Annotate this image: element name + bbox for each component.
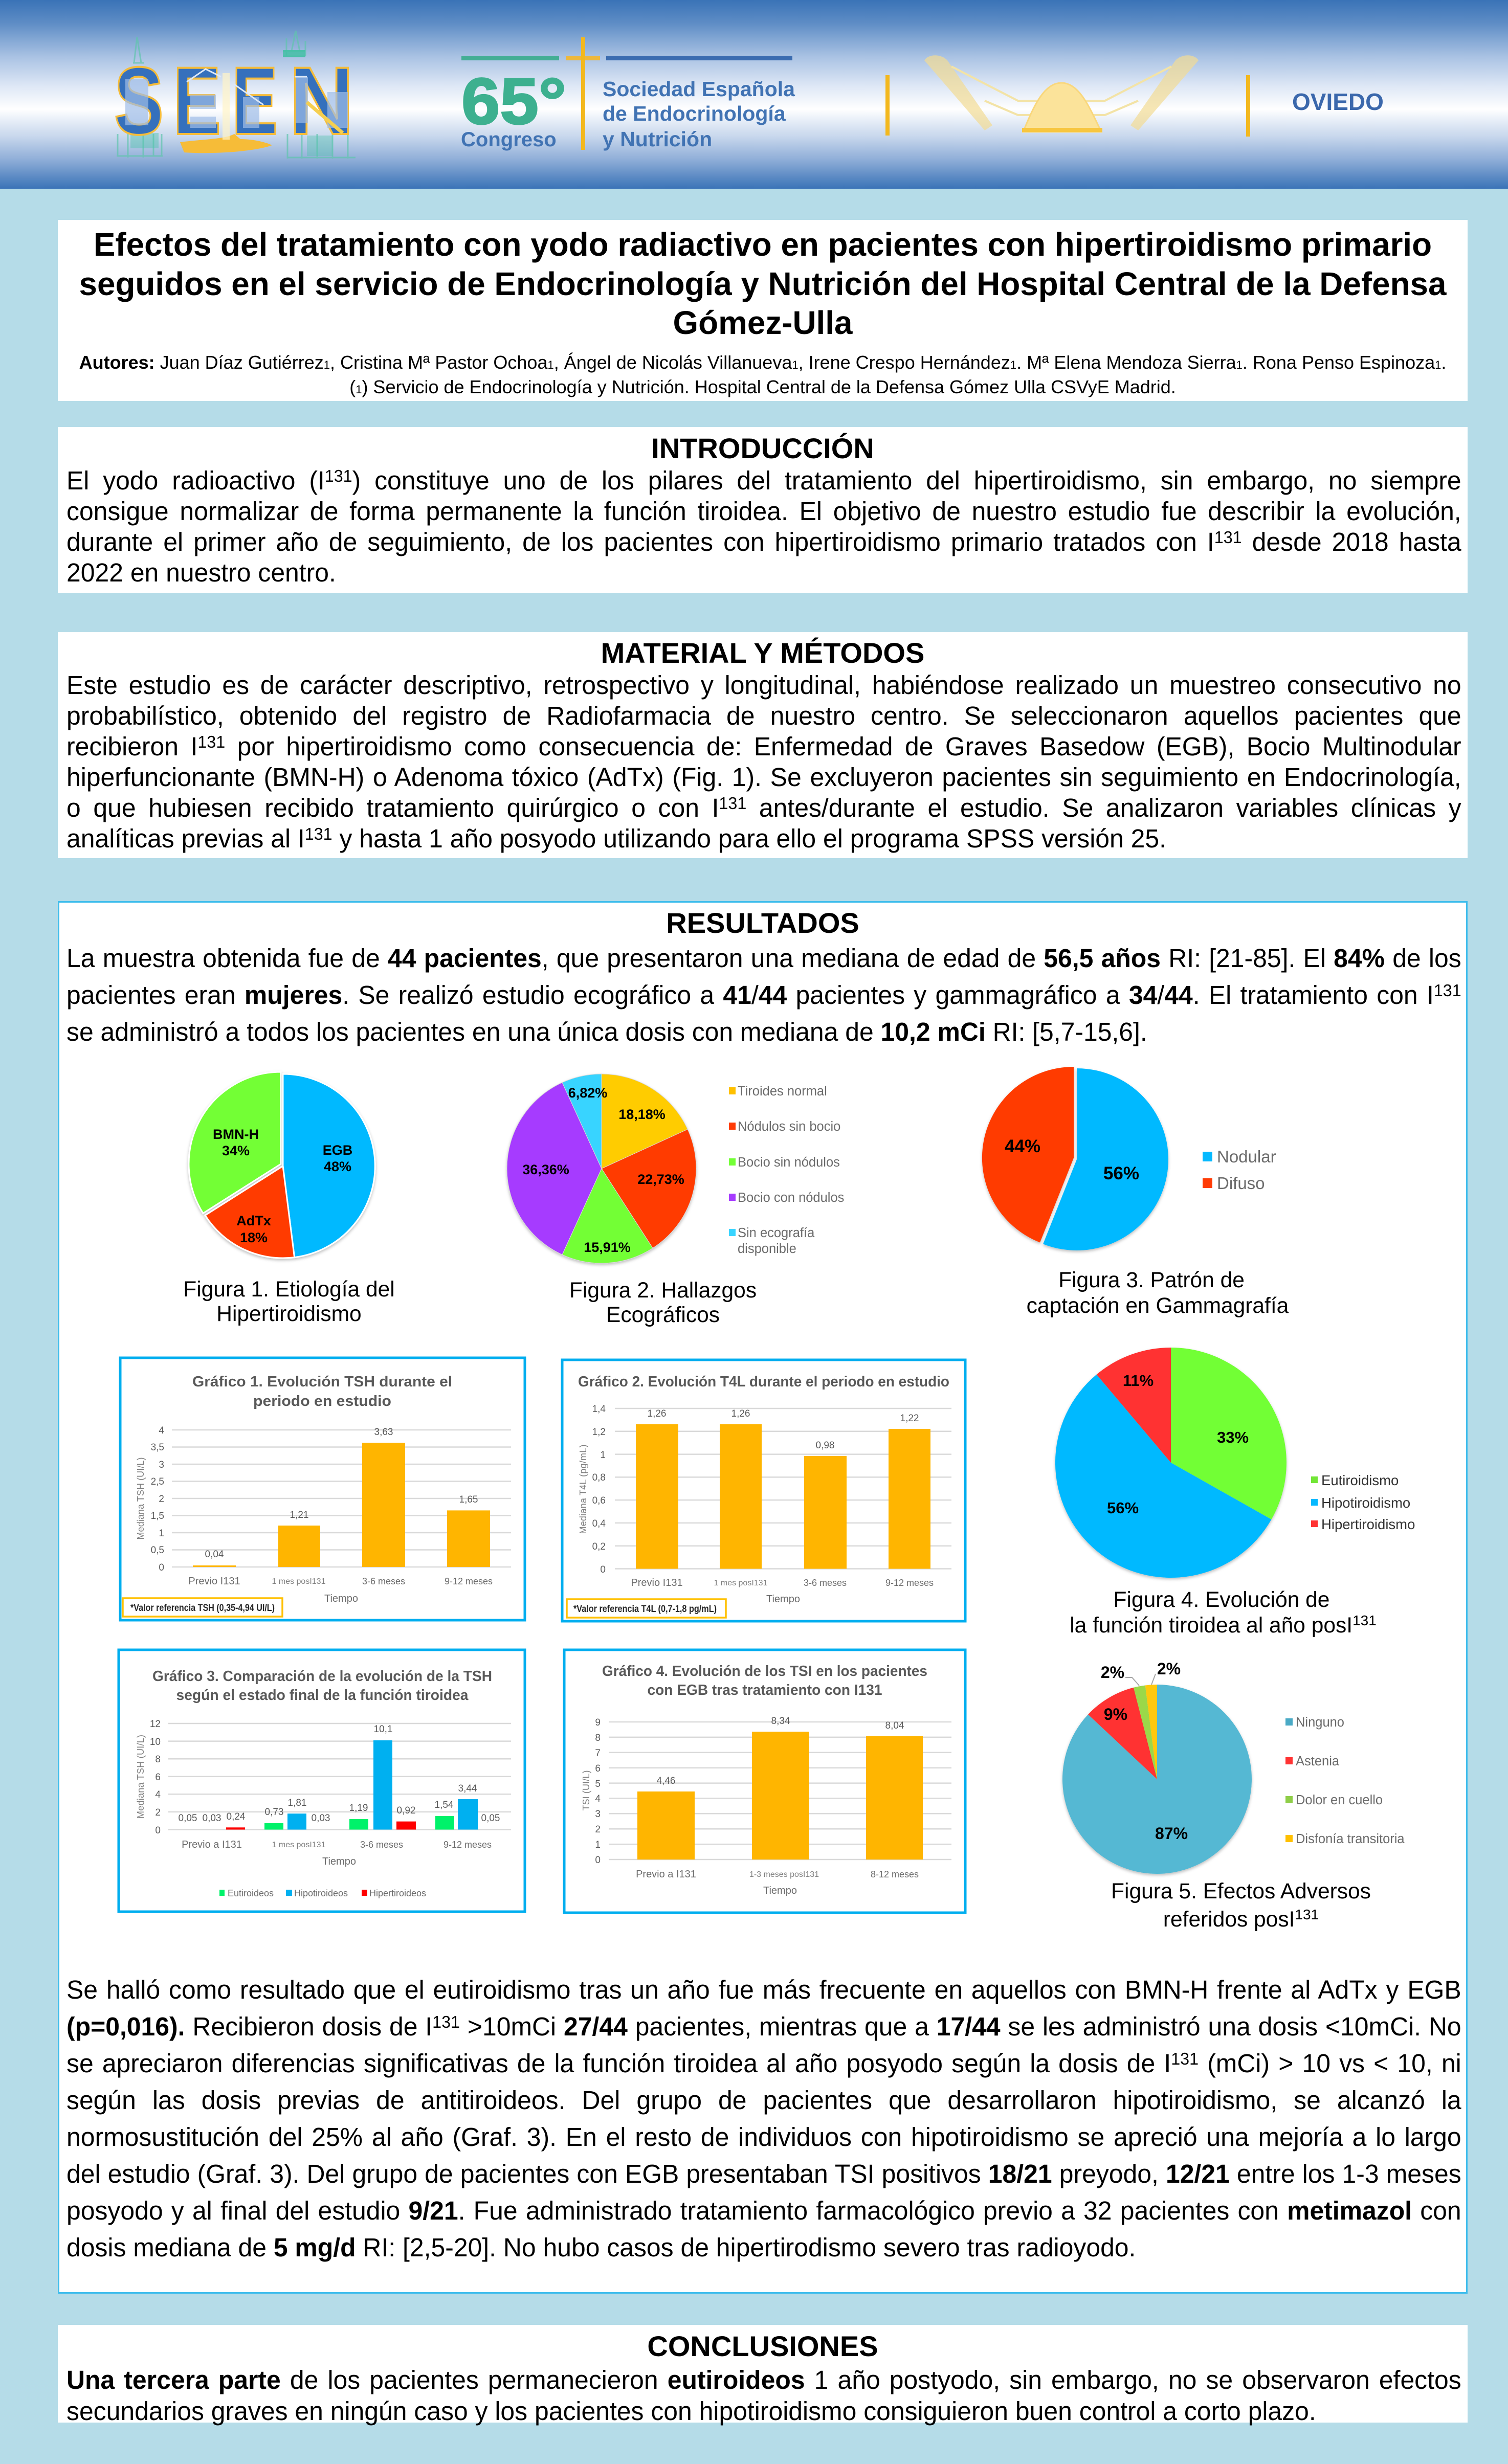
pie chart: función tiroidea: 11%	[1123, 1372, 1154, 1390]
chart: gráfico 3 TSH comparación: 10,1	[374, 1724, 392, 1735]
pie chart: etiología: AdTx	[236, 1213, 271, 1228]
chart: gráfico 4 TSI: 1	[595, 1840, 601, 1850]
chart: gráfico 3 TSH comparación: 0	[155, 1825, 161, 1836]
logo: Oviedo: OVIEDO	[1292, 88, 1384, 115]
chart: gráfico 2 T4L: Tiempo	[766, 1594, 800, 1605]
text: introducción: durante el primer año de seguimiento, de los pacientes con hipertiroidismo primario tratados con I131 desde 2018 hasta	[66, 527, 1461, 556]
chart: gráfico 4 TSI: 2	[595, 1824, 601, 1835]
caption: figura 3: captación en Gammagrafía	[1027, 1294, 1289, 1318]
caption: figura 2: Figura 2. Hallazgos	[569, 1279, 757, 1303]
pie chart: patrón de captación: 56%	[1103, 1163, 1139, 1183]
pie chart: etiología: 48%	[324, 1159, 351, 1174]
text: material y métodos	[66, 670, 1461, 853]
text: resultados discusión: (p=0,016). Recibieron dosis de I131 >10mCi 27/44 pacientes, mientras que a 17/44 se les administró una dosis <10mCi. No	[66, 2012, 1461, 2041]
heading: poster title: Efectos del tratamiento con yodo radiactivo en pacientes con hipertiroidismo primario	[94, 226, 1432, 263]
chart: gráfico 1 TSH: 0,5	[151, 1545, 164, 1556]
chart: gráfico 3 TSH comparación: 1 mes posI131	[272, 1841, 326, 1849]
pie chart: efectos adversos: 87%	[1155, 1824, 1188, 1843]
chart: gráfico 4 TSI: 8,34	[771, 1716, 790, 1727]
pie chart: etiología: 34%	[222, 1143, 250, 1158]
pie chart: patrón de captación	[982, 1067, 1168, 1250]
legend: patrón de captación: Nodular	[1217, 1147, 1276, 1166]
caption: figura 5: Figura 5. Efectos Adversos	[1111, 1879, 1371, 1903]
text: resultados intro: pacientes eran mujeres. Se realizó estudio ecográfico a 41/44 pacientes y gammagráfico a 34/44. El tratamiento con I131	[66, 980, 1461, 1010]
caption: figura 4: Figura 4. Evolución de	[1114, 1588, 1329, 1612]
text: introducción	[66, 466, 1461, 587]
logo: 65 Congreso: y Nutrición	[603, 127, 712, 151]
text: resultados discusión: Se halló como resultado que el eutiroidismo tras un año fue más frecuente en aquellos con BMN-H frente al AdTx y EGB	[66, 1975, 1461, 2004]
chart: gráfico 4 TSI: 4,46	[657, 1776, 675, 1786]
chart: gráfico 4 TSI: con EGB tras tratamiento con I131	[648, 1682, 882, 1698]
chart: gráfico 3 TSH comparación: 8	[155, 1754, 161, 1765]
caption: figura 3	[1027, 1268, 1289, 1318]
legend: efectos adversos: Ninguno	[1296, 1715, 1344, 1730]
chart: gráfico 4 TSI: 8	[595, 1733, 601, 1743]
legend: patrón de captación	[1203, 1147, 1276, 1193]
pie chart: efectos adversos: 2%	[1157, 1660, 1181, 1678]
chart: gráfico 2 T4L: 1,26	[731, 1408, 750, 1419]
chart: gráfico 2 T4L: 0,4	[592, 1518, 606, 1529]
legend: patrón de captación: Difuso	[1217, 1174, 1265, 1193]
chart: gráfico 1 TSH: 2,5	[151, 1476, 164, 1487]
chart: gráfico 3 TSH comparación: 4	[155, 1789, 161, 1800]
heading: introducción: INTRODUCCIÓN	[651, 432, 874, 464]
pie chart: función tiroidea: 33%	[1217, 1428, 1249, 1446]
logo: SEEN: S	[114, 47, 164, 154]
text: introducción: El yodo radioactivo (I131) constituye uno de los pilares del tratamiento del hipertiroidismo, sin embargo, no siempre	[66, 466, 1461, 495]
chart: gráfico 1 TSH: 3	[159, 1460, 164, 1470]
chart: gráfico 4 TSI: 1-3 meses posI131	[749, 1870, 819, 1879]
text: material y métodos: hiperfuncionante (BMN-H) o Adenoma tóxico (AdTx) (Fig. 1). Se excluyeron pacientes sin seguimiento en Endocrinología,	[66, 763, 1461, 792]
pie chart: patrón de captación: 44%	[1005, 1136, 1040, 1156]
chart: gráfico 2 T4L: Gráfico 2. Evolución T4L durante el periodo en estudio	[578, 1374, 949, 1390]
chart: gráfico 1 TSH: Tiempo	[324, 1593, 358, 1604]
panel: conclusiones	[58, 2325, 1468, 2423]
legend: hallazgos ecográficos: Bocio con nódulos	[738, 1191, 844, 1205]
chart: gráfico 2 T4L: 1,4	[592, 1404, 606, 1415]
chart: gráfico 1 TSH	[120, 1358, 525, 1620]
chart: gráfico 4 TSI: TSI (UI/L)	[581, 1771, 591, 1810]
chart: gráfico 3 TSH comparación: 6	[155, 1772, 161, 1783]
panel: introducción	[58, 427, 1468, 593]
pie chart: efectos adversos	[1062, 1660, 1252, 1874]
logo: SEEN: E	[173, 47, 221, 154]
text: resultados discusión: según las dosis previas de antitiroideos. Del grupo de pacientes que desarrollaron hipotiroidismo, se alcanzó la	[66, 2086, 1461, 2115]
caption: figura 5: referidos posI	[1163, 1908, 1295, 1932]
authors and affiliation	[79, 352, 1446, 397]
text: resultados intro: se administró a todos los pacientes en una única dosis con mediana de 10,2 mCi RI: [5,7-15,6].	[66, 1017, 1147, 1046]
authors and affiliation: Autores: Juan Díaz Gutiérrez1, Cristina Mª Pastor Ochoa1, Ángel de Nicolás Villanueva1, Irene Crespo Hernández1. Mª Elena Mendoza Sierra1. Rona Penso Espinoza1.	[79, 352, 1446, 373]
heading: material y métodos: MATERIAL Y MÉTODOS	[601, 637, 924, 669]
chart: gráfico 2 T4L: 9-12 meses	[885, 1578, 934, 1588]
legend: hallazgos ecográficos: Bocio sin nódulos	[738, 1155, 840, 1170]
text: resultados discusión: posyodo y al final del estudio 9/21. Fue administrado tratamiento farmacológico previo a 32 pacientes con metimazol con	[66, 2196, 1461, 2225]
chart: gráfico 3 TSH comparación: 3,44	[458, 1783, 477, 1794]
caption: figura 4: 131	[1352, 1612, 1377, 1628]
chart: gráfico 2 T4L: 0,8	[592, 1472, 606, 1483]
text: introducción: consigue normalizar de forma permanente la función tiroidea. El objetivo de nuestro estudio fue describir la evolución,	[66, 497, 1461, 526]
logo: 65 Congreso: Sociedad Española	[603, 77, 795, 101]
chart: gráfico 2 T4L: 1,22	[900, 1413, 919, 1424]
header banner with congress logos	[0, 0, 1508, 189]
chart: gráfico 1 TSH: 3,63	[374, 1427, 393, 1438]
pie chart: hallazgos ecográficos: 18,18%	[618, 1107, 666, 1122]
legend: función tiroidea: Eutiroidismo	[1321, 1472, 1399, 1488]
caption: figura 1: Figura 1. Etiología del	[183, 1278, 395, 1302]
chart: gráfico 3 TSH comparación: 12	[150, 1719, 161, 1730]
text: material y métodos: probabilístico, obtenido del registro de Radiofarmacia de nuestro centro. Se seleccionaron aquellos pacientes que	[66, 701, 1461, 730]
chart: gráfico 1 TSH: 3-6 meses	[362, 1576, 405, 1586]
chart: gráfico 1 TSH: 0	[159, 1562, 164, 1573]
authors and affiliation: (1) Servicio de Endocrinología y Nutrición. Hospital Central de la Defensa Gómez Ulla CSVyE Madrid.	[349, 376, 1176, 397]
chart: gráfico 2 T4L: 0,98	[816, 1440, 834, 1451]
chart: gráfico 3 TSH comparación: Hipertiroideos	[369, 1888, 426, 1898]
text: resultados discusión	[66, 1975, 1461, 2262]
caption: figura 2: Ecográficos	[606, 1303, 720, 1327]
chart: gráfico 3 TSH comparación: 9-12 meses	[443, 1840, 492, 1850]
chart: gráfico 4 TSI: 8,04	[885, 1720, 904, 1731]
logo: 65 Congreso: 65°	[461, 65, 566, 138]
caption: figura 1	[183, 1278, 395, 1326]
caption: figura 4: la función tiroidea al año posI	[1070, 1614, 1352, 1638]
chart: gráfico 2 T4L: Previo I131	[631, 1577, 683, 1588]
text: resultados intro	[66, 944, 1461, 1046]
caption: figura 2	[569, 1279, 757, 1327]
legend: función tiroidea	[1311, 1472, 1415, 1532]
chart: gráfico 4 TSI	[564, 1650, 965, 1913]
logo: SEEN: N	[289, 47, 354, 154]
panel: title	[58, 220, 1468, 401]
chart: gráfico 2 T4L: 3-6 meses	[804, 1578, 847, 1588]
panel: resultados	[58, 901, 1468, 2294]
legend: hallazgos ecográficos: Sin ecografía	[738, 1226, 815, 1240]
pie chart: efectos adversos: 2%	[1101, 1663, 1124, 1682]
pie chart: hallazgos ecográficos: 6,82%	[568, 1085, 607, 1101]
caption: figura 1: Hipertiroidismo	[216, 1302, 362, 1326]
pie chart: hallazgos ecográficos	[507, 1074, 696, 1263]
chart: gráfico 2 T4L: 0	[600, 1564, 606, 1575]
pie chart: efectos adversos: 9%	[1104, 1705, 1127, 1723]
chart: gráfico 1 TSH: 3,5	[151, 1442, 164, 1453]
chart: gráfico 2 T4L: *Valor referencia T4L (0,7-1,8 pg/mL)	[573, 1604, 717, 1615]
chart: gráfico 4 TSI: 4	[595, 1794, 601, 1804]
chart: gráfico 1 TSH: 1,5	[151, 1511, 164, 1521]
logo: 65 Congreso	[461, 37, 795, 151]
divider bars and building emblem	[885, 55, 1250, 137]
chart: gráfico 4 TSI: 0	[595, 1855, 601, 1866]
chart: gráfico 1 TSH: 9-12 meses	[445, 1576, 493, 1586]
logo: SEEN	[114, 31, 356, 159]
chart: gráfico 1 TSH: Previo I131	[188, 1576, 240, 1587]
pie chart: etiología: BMN-H	[213, 1127, 259, 1142]
text: material y métodos: o que hubiesen recibido tratamiento quirúrgico o con I131 antes/durante el estudio. Se analizaron variables clínicas y	[66, 793, 1461, 822]
chart: gráfico 3 TSH comparación: Mediana TSH (UI/L)	[136, 1735, 146, 1819]
chart: gráfico 4 TSI: 8-12 meses	[871, 1869, 919, 1879]
chart: gráfico 2 T4L: 1 mes posI131	[714, 1579, 768, 1587]
chart: gráfico 1 TSH: 1	[159, 1528, 164, 1539]
legend: hallazgos ecográficos: Nódulos sin bocio	[738, 1119, 840, 1134]
chart: gráfico 4 TSI: Tiempo	[763, 1885, 797, 1896]
chart: gráfico 3 TSH comparación: 0,05	[179, 1813, 197, 1824]
caption: figura 3: Figura 3. Patrón de	[1058, 1268, 1245, 1292]
chart: gráfico 1 TSH: 4	[159, 1425, 164, 1436]
chart: gráfico 3 TSH comparación: 1,19	[349, 1803, 368, 1813]
legend: efectos adversos: Disfonía transitoria	[1296, 1832, 1405, 1846]
text: resultados discusión: del estudio (Graf. 3). Del grupo de pacientes con EGB presentaban TSI positivos 18/21 preyodo, 12/21 entre los 1-3 meses	[66, 2159, 1461, 2188]
text: conclusiones	[66, 2365, 1461, 2426]
text: resultados discusión: se apreciaron diferencias significativas de la función tiroidea al año posyodo según la dosis de I131 (mCi) > 10 vs < 10, ni	[66, 2049, 1461, 2078]
logo: SEEN: E	[232, 47, 278, 154]
chart: gráfico 3 TSH comparación	[119, 1650, 525, 1912]
pie chart: hallazgos ecográficos: 22,73%	[637, 1172, 684, 1187]
pie chart: hallazgos ecográficos: 15,91%	[584, 1240, 631, 1255]
text: conclusiones: secundarios graves en ningún caso y los pacientes con hipotiroidismo consiguieron buen control a corto plazo.	[66, 2396, 1316, 2426]
chart: gráfico 3 TSH comparación: 0,92	[397, 1805, 415, 1816]
chart: gráfico 3 TSH comparación: Eutiroideos	[228, 1888, 274, 1898]
logo: 65 Congreso: Congreso	[461, 128, 557, 151]
chart: gráfico 4 TSI: 9	[595, 1717, 601, 1728]
text: resultados discusión: dosis mediana de 5 mg/d RI: [2,5-20]. No hubo casos de hipertirodismo severo tras radioyodo.	[66, 2233, 1136, 2262]
text: material y métodos: Este estudio es de carácter descriptivo, retrospectivo y longitudinal, habiéndose realizado un muestreo consecutivo no	[66, 670, 1461, 700]
chart: gráfico 3 TSH comparación: 0,24	[227, 1811, 246, 1822]
caption: figura 5	[1111, 1879, 1371, 1932]
chart: gráfico 3 TSH comparación: 0,03	[203, 1813, 221, 1824]
chart: gráfico 2 T4L	[562, 1360, 965, 1621]
chart: gráfico 4 TSI: 5	[595, 1779, 601, 1789]
caption: figura 4	[1070, 1588, 1377, 1638]
chart: gráfico 3 TSH comparación: Previo a I131	[182, 1839, 242, 1850]
chart: gráfico 2 T4L: 1	[600, 1450, 606, 1461]
heading: conclusiones: CONCLUSIONES	[647, 2330, 878, 2362]
chart: gráfico 2 T4L: 0,2	[592, 1541, 606, 1552]
heading: resultados: RESULTADOS	[666, 907, 859, 939]
heading: poster title	[79, 226, 1447, 341]
legend: hallazgos ecográficos	[729, 1084, 844, 1256]
chart: gráfico 3 TSH comparación: 1,81	[288, 1798, 306, 1808]
text: resultados intro: La muestra obtenida fue de 44 pacientes, que presentaron una mediana de edad de 56,5 años RI: [21-85]. El 84% de los	[66, 944, 1461, 973]
chart: gráfico 3 TSH comparación: 0,73	[265, 1807, 283, 1818]
legend: función tiroidea: Hipotiroidismo	[1321, 1495, 1410, 1511]
chart: gráfico 3 TSH comparación: según el estado final de la función tiroidea	[176, 1687, 469, 1704]
chart: gráfico 4 TSI: Gráfico 4. Evolución de los TSI en los pacientes	[602, 1663, 927, 1679]
chart: gráfico 1 TSH: Gráfico 1. Evolución TSH durante el	[192, 1374, 452, 1390]
chart: gráfico 3 TSH comparación: Hipotiroideos	[294, 1888, 348, 1898]
pie chart: función tiroidea: 56%	[1107, 1499, 1139, 1517]
chart: gráfico 3 TSH comparación: 10	[150, 1737, 161, 1748]
text: material y métodos: recibieron I131 por hipertiroidismo como consecuencia de: Enfermedad de Graves Basedow (EGB), Bocio Multinodular	[66, 732, 1461, 761]
chart: gráfico 1 TSH: 0,04	[205, 1549, 224, 1560]
text: introducción: 2022 en nuestro centro.	[66, 558, 336, 587]
chart: gráfico 3 TSH comparación: 0,03	[312, 1813, 330, 1824]
logo: 65 Congreso: de Endocrinología	[603, 102, 786, 125]
caption: figura 5: 131	[1295, 1907, 1319, 1922]
text: conclusiones: Una tercera parte de los pacientes permanecieron eutiroideos 1 año postyodo, sin embargo, no se observaron efectos	[66, 2365, 1461, 2394]
chart: gráfico 1 TSH: periodo en estudio	[253, 1393, 391, 1409]
legend: efectos adversos: Astenia	[1296, 1754, 1340, 1768]
panel: material y métodos	[58, 632, 1468, 858]
chart: gráfico 1 TSH: 2	[159, 1494, 164, 1505]
chart: gráfico 1 TSH: *Valor referencia TSH (0,35-4,94 UI/L)	[130, 1603, 275, 1614]
legend: hallazgos ecográficos: Tiroides normal	[738, 1084, 827, 1099]
pie chart: etiología: 18%	[240, 1230, 268, 1245]
chart: gráfico 1 TSH: 1 mes posI131	[272, 1577, 326, 1586]
legend: efectos adversos	[1285, 1715, 1405, 1846]
chart: gráfico 4 TSI: 3	[595, 1809, 601, 1820]
chart: gráfico 2 T4L: 1,2	[592, 1427, 606, 1438]
chart: gráfico 1 TSH: 1,65	[459, 1494, 478, 1505]
text: material y métodos: analíticas previas al I131 y hasta 1 año posyodo utilizando para ello el programa SPSS versión 25.	[66, 824, 1166, 853]
legend: hallazgos ecográficos: disponible	[738, 1242, 796, 1256]
heading: poster title: seguidos en el servicio de Endocrinología y Nutrición del Hospital Central de la Defensa	[79, 265, 1447, 302]
chart: gráfico 2 T4L: Mediana T4L (pg/mL)	[578, 1444, 588, 1534]
legend: efectos adversos: Dolor en cuello	[1296, 1793, 1383, 1807]
chart: gráfico 3 TSH comparación: 1,54	[435, 1800, 454, 1810]
heading: poster title: Gómez-Ulla	[673, 304, 852, 341]
chart: gráfico 3 TSH comparación: Gráfico 3. Comparación de la evolución de la TSH	[152, 1668, 492, 1685]
chart: gráfico 3 TSH comparación: 2	[155, 1807, 161, 1818]
chart: gráfico 4 TSI: 7	[595, 1748, 601, 1759]
chart: gráfico 4 TSI: Previo a I131	[636, 1869, 696, 1880]
text: resultados discusión: normosustitución del 25% al año (Graf. 3). En el resto de individuos con hipotiroidismo se apreció una mejoría a lo largo	[66, 2122, 1461, 2152]
chart: gráfico 2 T4L: 1,26	[648, 1408, 666, 1419]
legend: función tiroidea: Hipertiroidismo	[1321, 1516, 1415, 1532]
pie chart: hallazgos ecográficos: 36,36%	[522, 1162, 569, 1177]
chart: gráfico 1 TSH: 1,21	[290, 1510, 308, 1520]
chart: gráfico 4 TSI: 6	[595, 1763, 601, 1774]
chart: gráfico 1 TSH: Mediana TSH (UI/L)	[136, 1458, 146, 1539]
pie chart: función tiroidea	[1055, 1348, 1287, 1578]
chart: gráfico 3 TSH comparación: 0,05	[481, 1813, 500, 1824]
pie chart: etiología	[189, 1072, 375, 1258]
chart: gráfico 3 TSH comparación: 3-6 meses	[360, 1840, 403, 1850]
chart: gráfico 2 T4L: 0,6	[592, 1495, 606, 1506]
chart: gráfico 3 TSH comparación: Tiempo	[322, 1856, 356, 1867]
pie chart: etiología: EGB	[323, 1143, 352, 1158]
